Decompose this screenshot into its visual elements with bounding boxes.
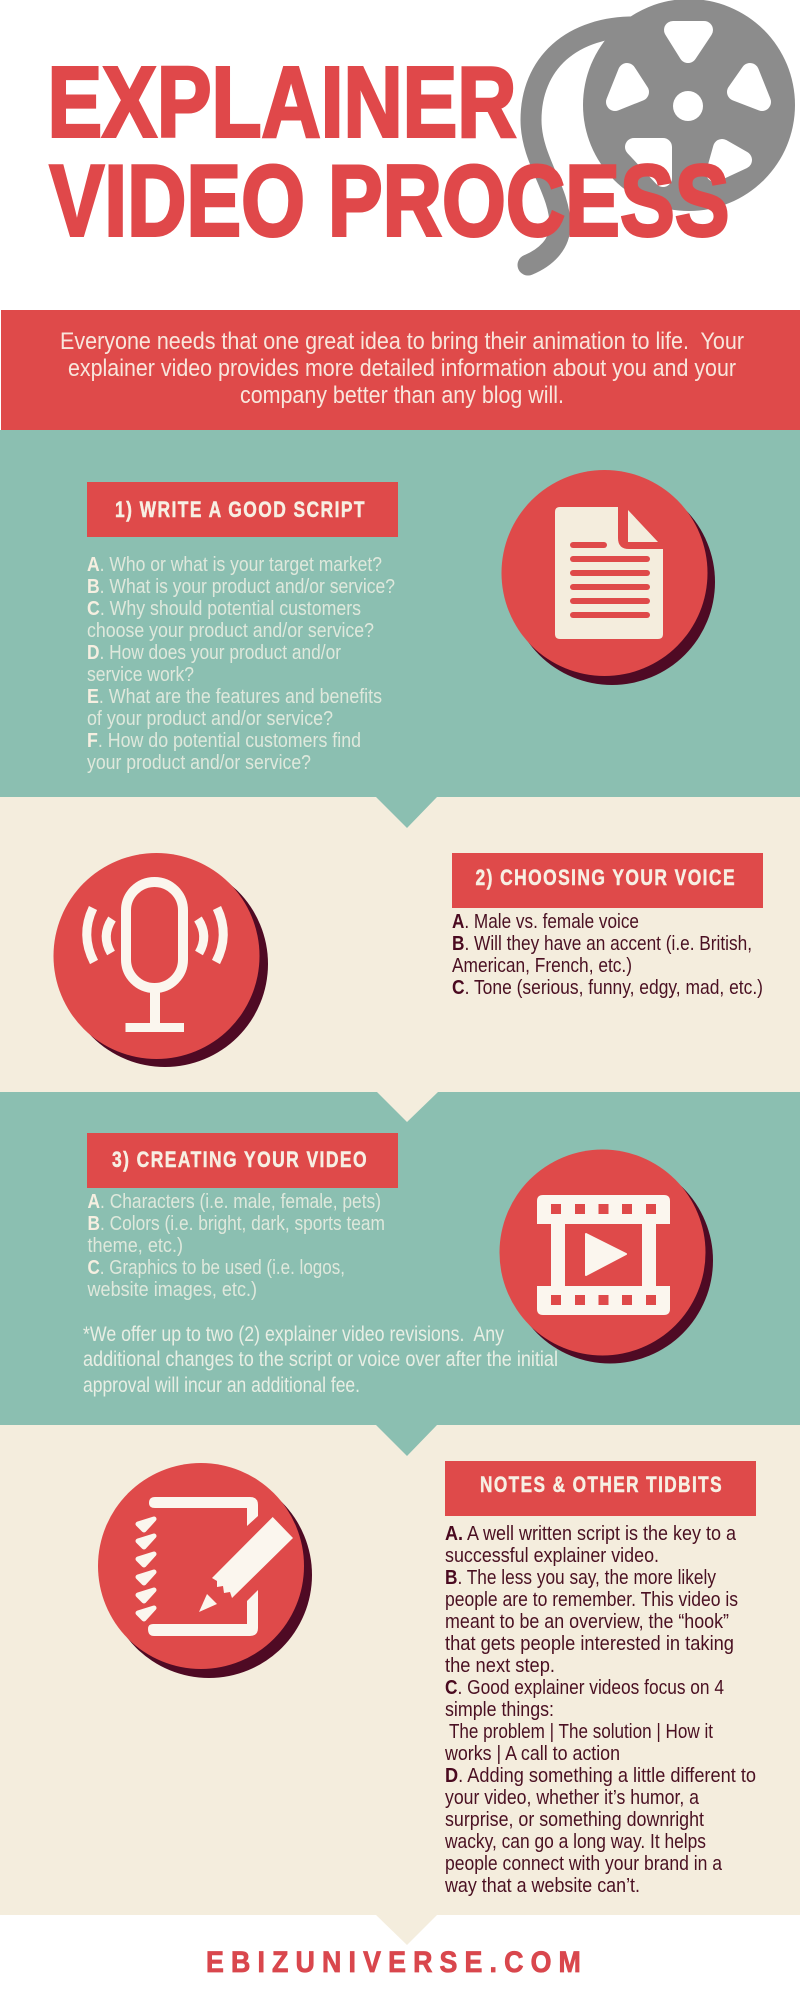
panel: step 3 creating your video (83, 1133, 713, 1397)
text block: revisions footnote: *We offer up to two (2) explainer video revisions. Any (83, 1323, 504, 1346)
text block: notes list: that gets people interested in taking (445, 1633, 734, 1655)
text block: notes list: A. A well written script is the key to a (445, 1523, 737, 1545)
heading: step 2: 2) CHOOSING YOUR VOICE (476, 865, 736, 890)
text block: step 2 list: B. Will they have an accent (i.e. British, (452, 933, 752, 955)
footer website link text: EBIZUNIVERSE.COM (206, 1946, 588, 1979)
text block: notes list: the next step. (445, 1655, 555, 1677)
text block: notes list: The problem | The solution | How it (449, 1721, 713, 1743)
text block: step 1 questions: service work? (87, 664, 194, 686)
panel: intro band: company better than any blog will. (240, 382, 564, 409)
text block: notes list: wacky, can go a long way. It helps (444, 1831, 706, 1853)
text block: notes list (444, 1523, 756, 1897)
panel: step 1 write a good script (87, 470, 715, 774)
text block: notes list: surprise, or something downright (445, 1809, 704, 1831)
icon: microphone (54, 853, 268, 1067)
text block: step 2 list: A. Male vs. female voice (452, 911, 639, 933)
panel: step 2 choosing your voice (54, 853, 763, 1067)
text block: notes list: D. Adding something a little different to (445, 1765, 756, 1787)
text block: step 1 questions: B. What is your product and/or service? (87, 576, 395, 598)
text block: revisions footnote: approval will incur an additional fee. (83, 1374, 360, 1397)
text block: notes list: way that a website can’t. (444, 1875, 640, 1897)
heading: notes: NOTES & OTHER TIDBITS (480, 1472, 723, 1497)
title (48, 46, 730, 258)
text block: step 3 list: website images, etc.) (87, 1279, 257, 1301)
text block: step 1 questions: your product and/or service? (87, 752, 311, 774)
text block: step 1 questions: E. What are the features and benefits (87, 686, 382, 708)
icon: film reel (528, 0, 795, 265)
text block: step 3 list: A. Characters (i.e. male, female, pets) (88, 1191, 381, 1213)
text block: notes list: your video, whether it’s humor, a (445, 1787, 700, 1809)
text block: step 1 questions (87, 554, 395, 774)
panel: intro band (1, 310, 800, 430)
icon: document (502, 470, 715, 685)
text block: step 2 list: C. Tone (serious, funny, edgy, mad, etc.) (452, 977, 763, 999)
text block: notes list: successful explainer video. (445, 1545, 659, 1567)
text block: notes list: simple things: (445, 1699, 554, 1721)
text block: notes list: C. Good explainer videos focus on 4 (445, 1677, 724, 1699)
text block: step 1 questions: D. How does your product and/or (87, 642, 341, 664)
text block: step 1 questions: F. How do potential customers find (87, 730, 361, 752)
panel: notes and other tidbits (98, 1461, 756, 1897)
text block: step 3 list (87, 1191, 385, 1301)
text block: revisions footnote (83, 1323, 558, 1397)
text block: revisions footnote: additional changes to the script or voice over after the initial (83, 1348, 558, 1371)
text block: step 3 list: theme, etc.) (88, 1235, 183, 1257)
text block: step 3 list: B. Colors (i.e. bright, dark, sports team (88, 1213, 385, 1235)
text block: notes list: works | A call to action (444, 1743, 620, 1765)
icon: film strip with play button (500, 1150, 713, 1364)
panel: intro band: explainer video provides more detailed information about you and your (68, 355, 736, 382)
icon: notepad and pencil (98, 1463, 312, 1678)
text block: step 2 list: American, French, etc.) (452, 955, 632, 977)
panel: section backgrounds (0, 430, 800, 1945)
heading: step 3: 3) CREATING YOUR VIDEO (112, 1147, 368, 1172)
text block: notes list: B. The less you say, the more likely (445, 1567, 716, 1589)
heading: step 1 (87, 482, 398, 537)
heading: notes (445, 1461, 756, 1516)
text block: step 1 questions: choose your product and/or service? (87, 620, 374, 642)
text block: step 2 list (452, 911, 763, 999)
text block: notes list: people are to remember. This video is (445, 1589, 738, 1611)
text block: notes list: meant to be an overview, the “hook” (445, 1611, 729, 1633)
heading: step 3 (87, 1133, 398, 1188)
text block: notes list: people connect with your brand in a (445, 1853, 723, 1875)
text block: step 1 questions: A. Who or what is your target market? (87, 554, 382, 576)
heading: step 2 (452, 853, 763, 908)
heading: step 1: 1) WRITE A GOOD SCRIPT (115, 497, 366, 522)
text block: step 1 questions: of your product and/or service? (87, 708, 333, 730)
text block: step 1 questions: C. Why should potential customers (87, 598, 361, 620)
title: EXPLAINER (48, 46, 516, 158)
text block: step 3 list: C. Graphics to be used (i.e. logos, (88, 1257, 345, 1279)
